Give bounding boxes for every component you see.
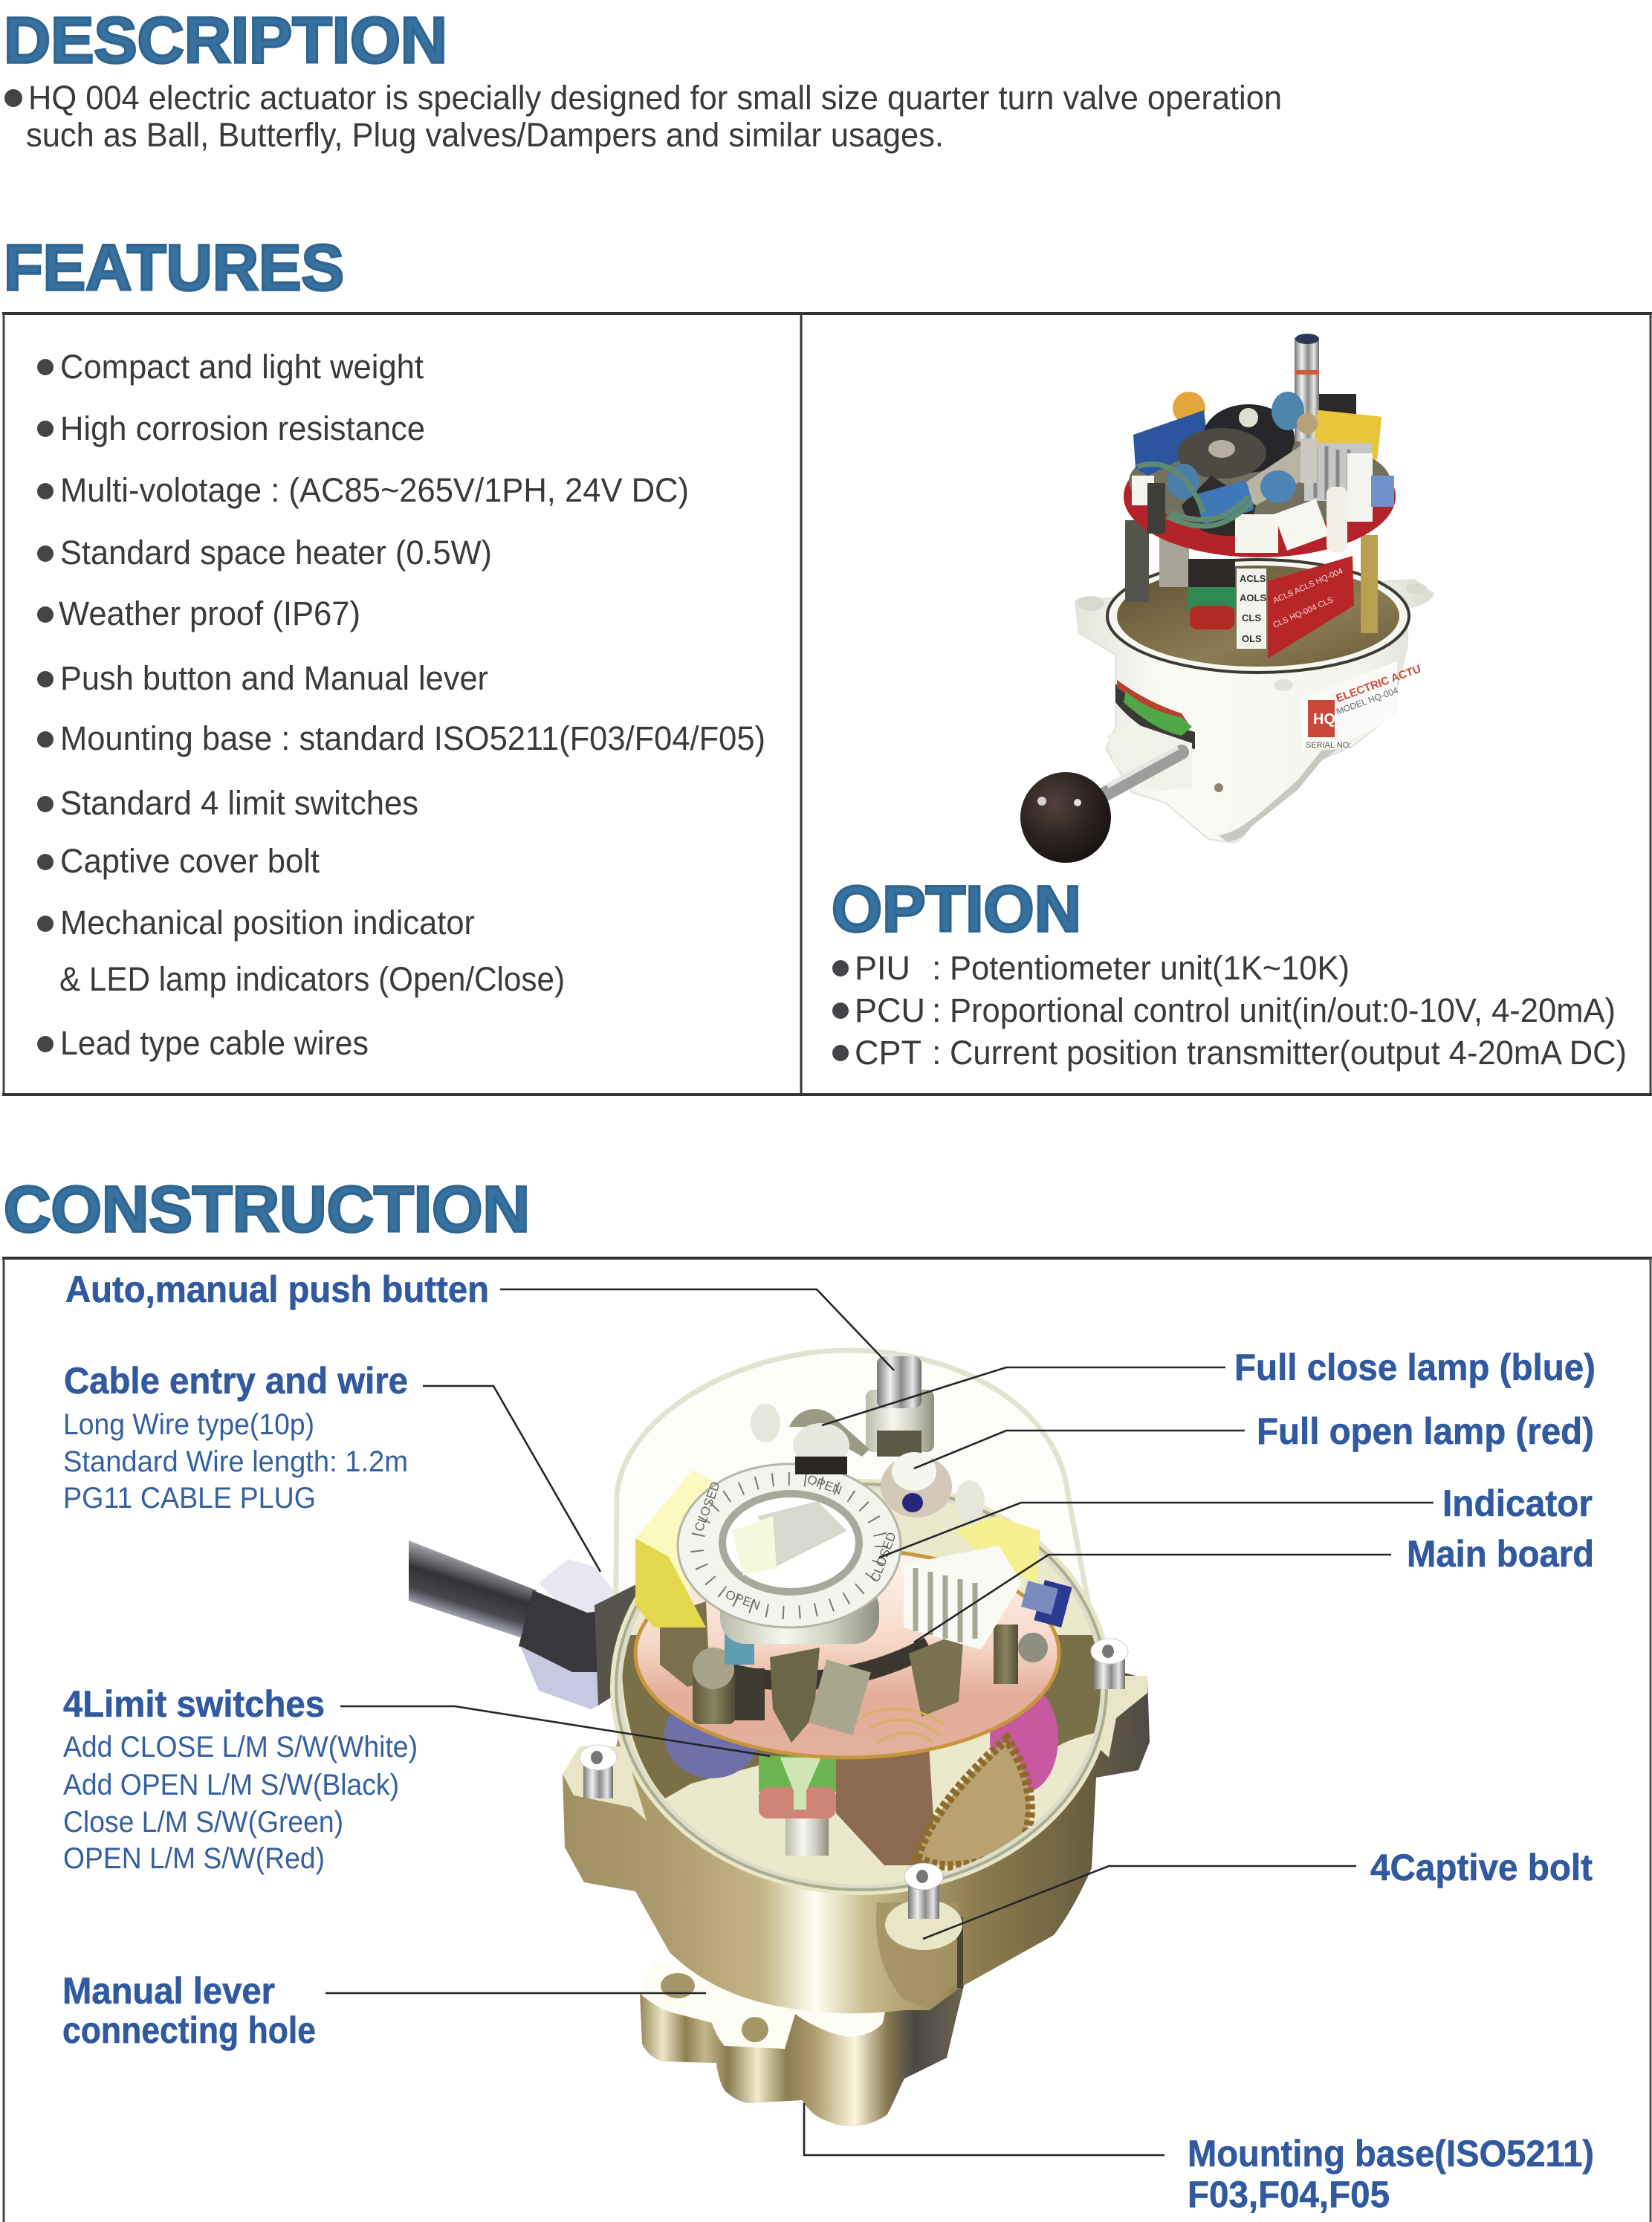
- feature: position indicator: Mechanical position indicator: [60, 904, 475, 942]
- callout: mounting base: [804, 2103, 1594, 2215]
- callout: indicator: [879, 1483, 1593, 1558]
- indicator dial: OPEN: [806, 1472, 843, 1497]
- hanging capacitors: [660, 1601, 710, 1687]
- callout: cable entry and wire: Long Wire type(10p): [63, 1408, 314, 1441]
- feature: mounting base: Mounting base : standard ISO5211(F03/F04/F05): [60, 719, 765, 757]
- feature: limit switches: Standard 4 limit switches: [60, 784, 418, 822]
- photo label strip: OLS: [1242, 633, 1262, 644]
- transparent dome cover: [615, 1350, 1098, 1657]
- feature: voltage: Multi-volotage : (AC85~265V/1PH, 24V DC): [60, 471, 689, 509]
- photo standoffs: [1125, 520, 1149, 602]
- feature: heater: Standard space heater (0.5W): [60, 534, 492, 571]
- indicator dial: [678, 1464, 901, 1627]
- photo red switch board: [1268, 556, 1354, 658]
- photo nameplate: [1300, 661, 1422, 751]
- photo circuit components: [1132, 334, 1394, 553]
- body and flange: [563, 1665, 1150, 2013]
- tan gear wheel: [917, 1739, 1030, 1866]
- pcb traces: [862, 1708, 944, 1743]
- feature: position indicator: [37, 904, 565, 998]
- option: CPT: Current position transmitter(output 4-20mA DC): [950, 1034, 1627, 1072]
- callout: limit switches: Close L/M S/W(Green): [63, 1806, 343, 1839]
- callout: cable entry and wire: PG11 CABLE PLUG: [63, 1482, 316, 1515]
- front ear top: [885, 1899, 962, 1950]
- callout: main board: Main board: [1407, 1533, 1594, 1575]
- callout: mounting base: Mounting base(ISO5211): [1188, 2133, 1594, 2174]
- heading: description: DESCRIPTION: [4, 4, 447, 77]
- photo: actuator internals with lever: [1020, 334, 1434, 863]
- base with mounting holes: [640, 1962, 966, 2126]
- heat sink: [904, 1546, 1022, 1650]
- photo seal ring and floor: [1107, 560, 1409, 673]
- callout: manual lever connecting hole: [62, 1970, 706, 2051]
- photo red switch board: CLS HQ-004 CLS: [1272, 595, 1335, 630]
- photo nameplate: MODEL HQ-004: [1335, 685, 1400, 717]
- feature: compact: Compact and light weight: [60, 348, 424, 386]
- option: PCU: :: [932, 991, 942, 1029]
- callout: full close lamp: [822, 1347, 1596, 1425]
- captive bolts: [580, 1639, 1128, 1919]
- photo white body and base: [1075, 580, 1434, 843]
- callout: limit switches: OPEN L/M S/W(Red): [63, 1842, 325, 1875]
- indicator dial: OPEN: [724, 1587, 762, 1613]
- bullet: [4, 89, 22, 107]
- callout: manual lever connecting hole: connecting hole: [62, 2009, 316, 2051]
- photo nameplate: ELECTRIC ACTU: [1335, 663, 1422, 705]
- callout: limit switches: Add OPEN L/M S/W(Black): [63, 1769, 399, 1801]
- front ear lobe: [876, 1902, 962, 2009]
- callout: manual lever connecting hole: Manual lever: [62, 1970, 275, 2012]
- photo label strip: AOLS: [1240, 592, 1266, 603]
- feature: weather proof: Weather proof (IP67): [59, 595, 360, 632]
- photo lever plate: [1107, 725, 1192, 791]
- panel: features frame: [2, 314, 1652, 1095]
- indicator dial stem: [720, 1583, 879, 1644]
- glass opening interior: [610, 1479, 1112, 1895]
- limit switch cams: [759, 1756, 836, 1856]
- option: CPT: :: [932, 1034, 942, 1072]
- cable: [409, 1541, 537, 1638]
- feature: cable wires: Lead type cable wires: [60, 1024, 369, 1062]
- callout: limit switches: Add CLOSE L/M S/W(White): [63, 1731, 418, 1763]
- photo red switch board: ACLS ACLS HQ-004: [1272, 566, 1344, 606]
- photo label strip: [1237, 569, 1266, 649]
- photo label strip: CLS: [1242, 612, 1261, 623]
- feature: cover bolt: Captive cover bolt: [60, 842, 320, 880]
- callout: full close lamp: Full close lamp (blue): [1234, 1347, 1596, 1388]
- cable gland: [519, 1559, 639, 1709]
- auto manual push button post: [866, 1356, 934, 1457]
- full close lamp: [751, 1404, 869, 1474]
- dark olive wall: [622, 1635, 1101, 1798]
- illustration: actuator cutaway: [409, 1350, 1150, 2126]
- callout: full open lamp: [914, 1410, 1594, 1468]
- option: PIU: PIU: [855, 949, 910, 987]
- dark band under dial: [691, 1646, 929, 1681]
- callout: main board: [914, 1533, 1594, 1642]
- description line 1: HQ 004 electric actuator is specially designed for small size quarter turn valve operation: [28, 79, 1282, 117]
- callout: limit switches: [63, 1683, 770, 1875]
- heading: features: FEATURES: [4, 232, 344, 304]
- full open lamp: [881, 1452, 985, 1522]
- purple gear: [664, 1714, 757, 1778]
- callout: captive bolt: 4Captive bolt: [1370, 1847, 1593, 1888]
- pcb disc: [635, 1549, 1072, 1758]
- pcb screws: [635, 1579, 665, 1609]
- photo red pcb: [1124, 435, 1396, 557]
- feature: corrosion: High corrosion resistance: [60, 409, 425, 447]
- feature list: [37, 348, 765, 1062]
- option: CPT: CPT: [855, 1034, 921, 1072]
- callout: cable entry and wire: Cable entry and wire: [64, 1360, 408, 1402]
- option: PIU: Potentiometer unit(1K~10K): [950, 949, 1350, 987]
- option list: [832, 949, 1627, 1072]
- photo lever: [1096, 752, 1182, 799]
- callout: cable entry and wire: Standard Wire length: 1.2m: [63, 1445, 408, 1478]
- description text block: [4, 79, 1282, 154]
- photo nameplate: SERIAL NO:: [1306, 741, 1351, 750]
- callout: mounting base: F03,F04,F05: [1188, 2174, 1390, 2215]
- photo base shading: [1219, 749, 1338, 841]
- callout: limit switches: 4Limit switches: [63, 1683, 325, 1725]
- right yellow block: [955, 1516, 1040, 1583]
- photo limit switch stack: [1188, 559, 1235, 629]
- option: PIU: :: [932, 949, 942, 987]
- blue capacitor: [1034, 1580, 1072, 1627]
- photo label strip: ACLS: [1240, 573, 1266, 584]
- indicator dial: CLOSED: [692, 1480, 723, 1533]
- left yellow transformer: [635, 1470, 736, 1627]
- front ear shadow strip: [957, 1917, 963, 1988]
- option: PCU: Proportional control unit(in/out:0-10V, 4-20mA): [950, 991, 1616, 1029]
- heading: option: OPTION: [832, 873, 1081, 945]
- heading: construction: CONSTRUCTION: [4, 1173, 530, 1246]
- photo open sticker: [1115, 680, 1195, 749]
- photo nameplate: HQ: [1313, 711, 1335, 728]
- brown switch block: [836, 1746, 936, 1865]
- option: PCU: PCU: [855, 991, 925, 1029]
- callout: indicator: Indicator: [1442, 1483, 1593, 1524]
- left ear top: [563, 1746, 647, 1821]
- description line 2: such as Ball, Butterfly, Plug valves/Dampers and similar usages.: [26, 116, 944, 154]
- photo ball knob: [1020, 772, 1111, 863]
- callout: auto manual push button: Auto,manual push butten: [65, 1269, 489, 1310]
- callout: captive bolt: [923, 1847, 1593, 1939]
- callout: full open lamp: Full open lamp (red): [1257, 1410, 1594, 1452]
- callout: cable entry and wire: [63, 1360, 600, 1572]
- right ear top: [1092, 1676, 1147, 1758]
- magenta gear: [990, 1695, 1058, 1791]
- feature: push button: Push button and Manual lever: [60, 659, 488, 697]
- indicator dial: CLOSED: [868, 1530, 899, 1584]
- panel: construction frame: [2, 1258, 1652, 2222]
- callout: auto manual push button: [65, 1269, 894, 1370]
- feature: position indicator: & LED lamp indicators (Open/Close): [59, 960, 565, 998]
